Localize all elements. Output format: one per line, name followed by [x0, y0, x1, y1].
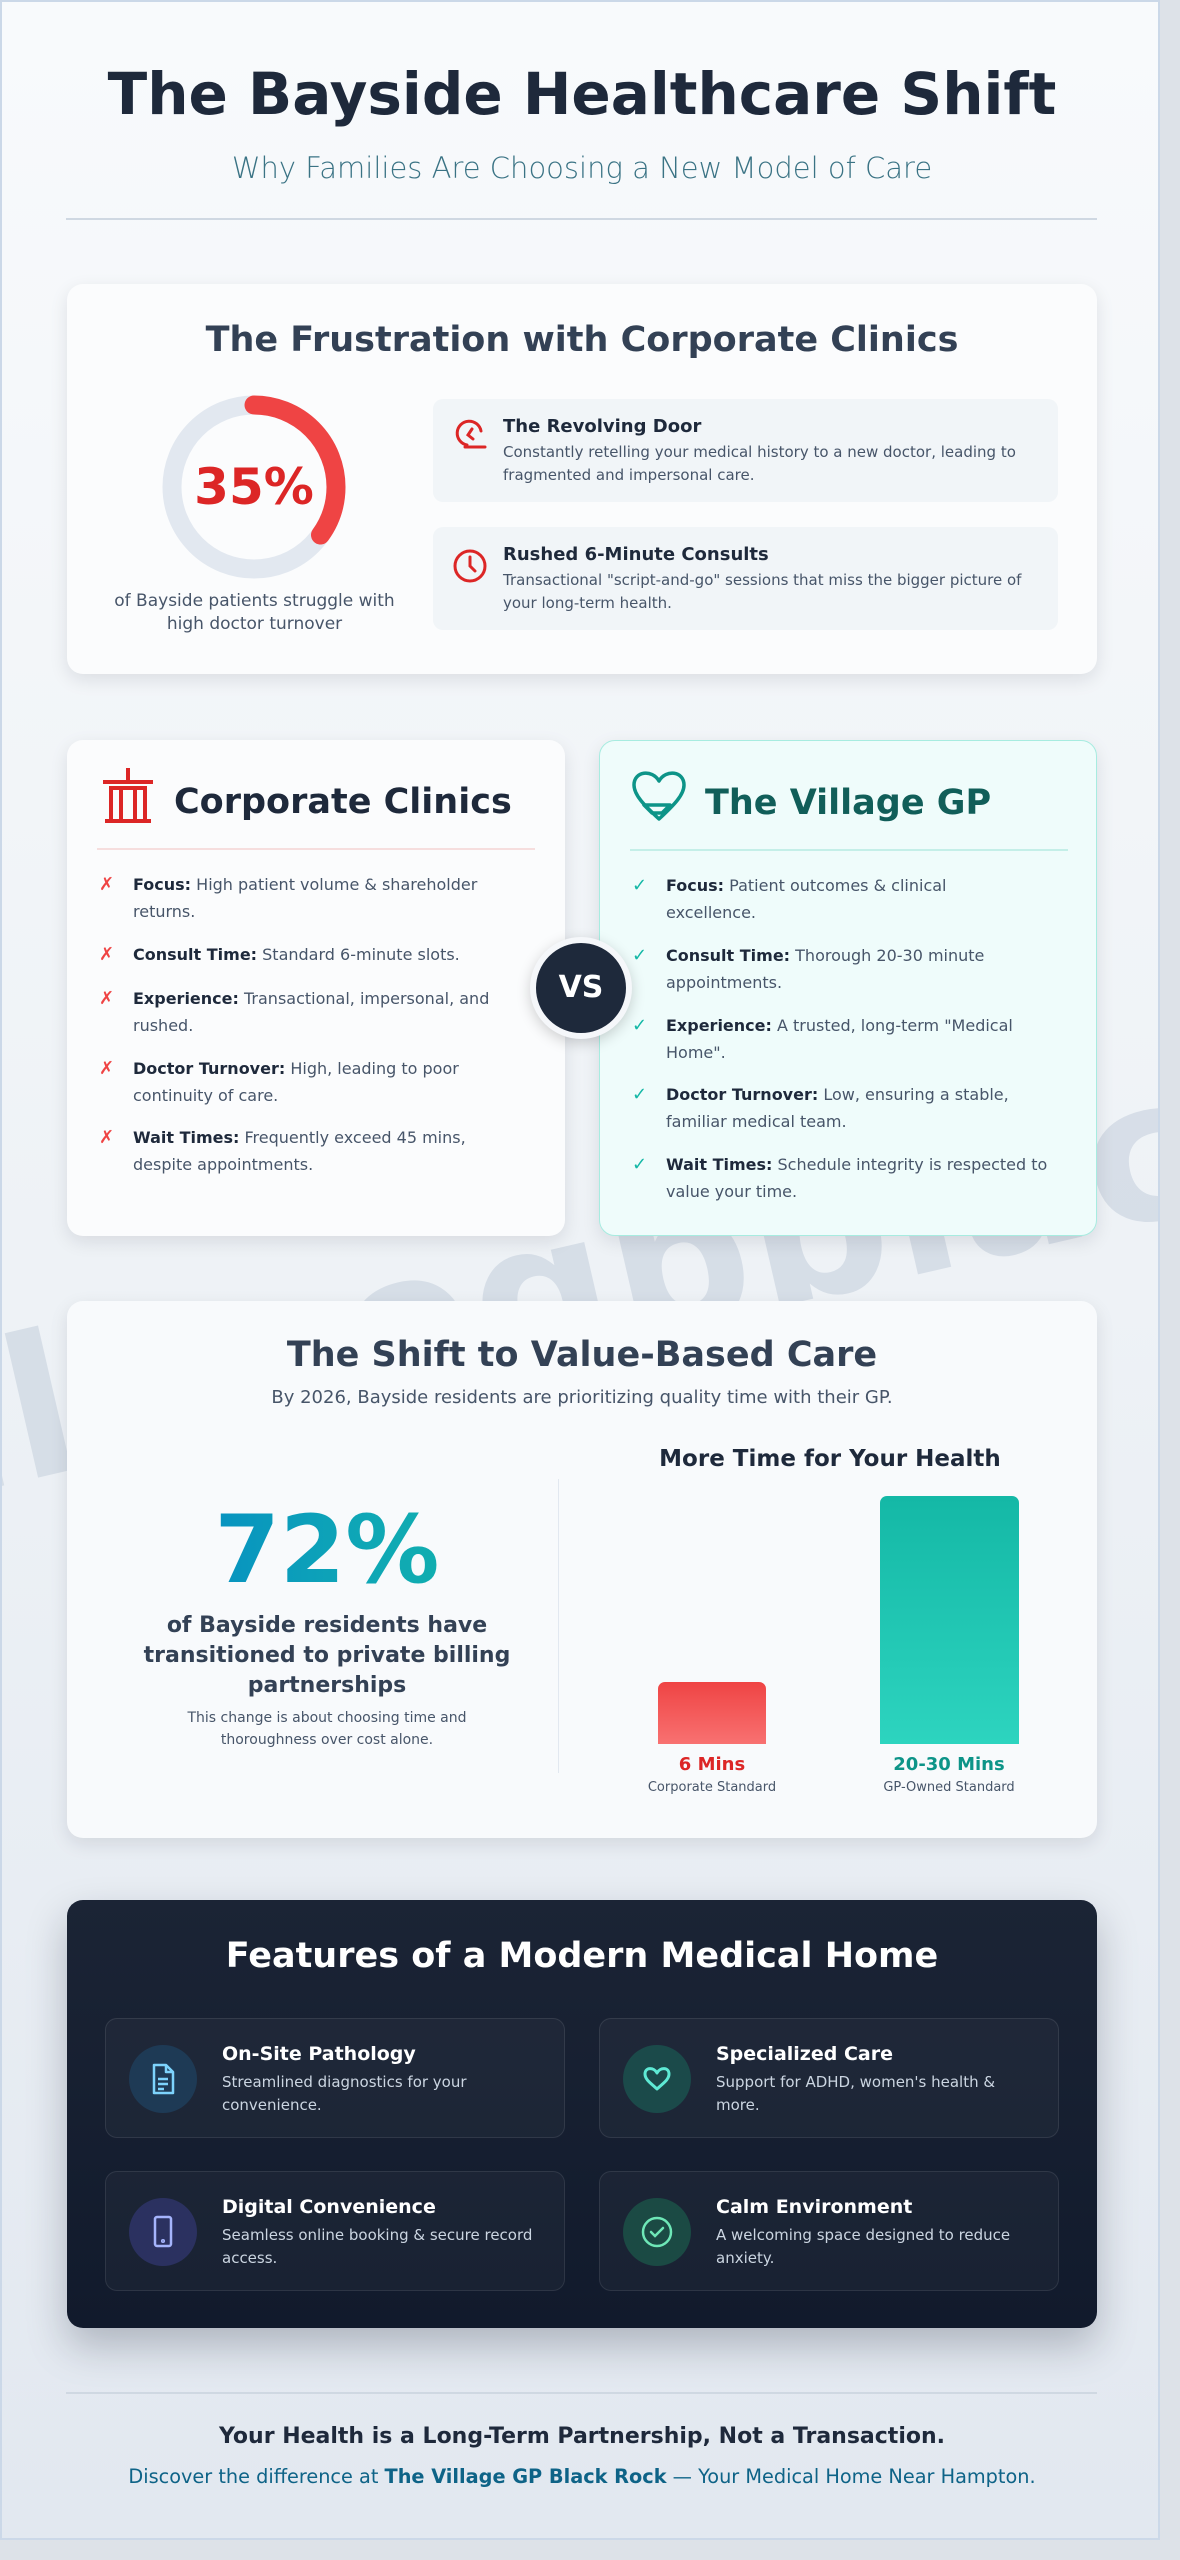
feature: specialized care: Support for ADHD, women's health & more.: [716, 2073, 995, 2114]
stat 72%: of Bayside residents have transitioned to private billing partnerships: [144, 1613, 510, 1698]
panel: village gp: ✓: [632, 945, 647, 966]
panel: corporate clinics: ✗: [99, 988, 114, 1009]
item: revolving door: Constantly retelling your medical history to a new doctor, leading to fragmented and impersonal care.: [503, 443, 1016, 484]
panel: village gp: ✓: [632, 1015, 647, 1036]
panel: corporate clinics: ✗: [99, 944, 114, 965]
vs badge: [530, 937, 632, 1039]
list: corporate drawbacks: [99, 874, 489, 1174]
list: corporate drawbacks: Doctor Turnover: High, leading to poor continuity of care.: [133, 1059, 459, 1105]
bar chart: consult time: GP-Owned Standard: [883, 1780, 1015, 1795]
panel: value-based care: [67, 1301, 1097, 1838]
stat 72%: This change is about choosing time and thoroughness over cost alone.: [187, 1710, 467, 1748]
heading: village gp: The Village GP: [705, 783, 991, 823]
footer link text: Discover the difference at The Village GP Black Rock — Your Medical Home Near Hampton.: [128, 2465, 1036, 2488]
title: The Bayside Healthcare Shift: [108, 60, 1056, 128]
feature: calm: Calm Environment: [716, 2196, 912, 2218]
list: village benefits: Wait Times: Schedule integrity is respected to value your time.: [666, 1155, 1047, 1201]
icon: revolving door: [456, 420, 486, 448]
item: revolving door: The Revolving Door: [503, 416, 701, 437]
item: rushed consults: Rushed 6-Minute Consults: [503, 544, 769, 565]
subtitle: Why Families Are Choosing a New Model of Care: [232, 151, 932, 185]
bar chart: consult time: 6 Mins: [679, 1754, 745, 1775]
heading: features: Features of a Modern Medical Home: [226, 1936, 938, 1976]
feature: digital: Digital Convenience: [222, 2196, 436, 2218]
list: village benefits: Consult Time: Thorough 20-30 minute appointments.: [666, 946, 984, 992]
panel: corporate clinics: ✗: [99, 874, 114, 895]
bar chart: consult time: Corporate Standard: [648, 1780, 776, 1795]
list: corporate drawbacks: Consult Time: Standard 6-minute slots.: [133, 945, 460, 964]
panel: corporate clinics: ✗: [99, 1058, 114, 1079]
feature: specialized care: Specialized Care: [716, 2043, 893, 2065]
subheading: By 2026, Bayside residents are prioritizing quality time with their GP.: [271, 1387, 893, 1408]
panel: frustration: [67, 284, 1097, 674]
list: corporate drawbacks: Focus: High patient volume & shareholder returns.: [133, 875, 477, 921]
panel: corporate clinics: ✗: [99, 1127, 114, 1148]
list: village benefits: Experience: A trusted, long-term "Medical Home".: [666, 1016, 1013, 1062]
footer tagline: Your Health is a Long-Term Partnership, Not a Transaction.: [219, 2424, 945, 2449]
icon: building: [103, 768, 153, 823]
feature: pathology: Streamlined diagnostics for your convenience.: [222, 2073, 467, 2114]
heading: corporate clinics: Corporate Clinics: [174, 782, 512, 822]
heading: frustration: The Frustration with Corporate Clinics: [206, 320, 958, 360]
feature: specialized care: [599, 2018, 1059, 2138]
donut caption: of Bayside patients struggle with high doctor turnover: [114, 591, 395, 634]
list: corporate drawbacks: Experience: Transactional, impersonal, and rushed.: [133, 989, 489, 1035]
item: rushed consults: [433, 527, 1058, 630]
panel: features: [67, 1900, 1097, 2328]
item: rushed consults: Transactional "script-and-go" sessions that miss the bigger picture of your long-term health.: [503, 571, 1021, 612]
panel: village gp: ✓: [632, 1154, 647, 1175]
list: corporate drawbacks: Wait Times: Frequently exceed 45 mins, despite appointments.: [133, 1128, 466, 1174]
feature: digital: Seamless online booking & secure record access.: [222, 2226, 532, 2267]
feature: calm: [599, 2171, 1059, 2291]
bar chart: consult time: 20-30 Mins: [893, 1754, 1005, 1775]
item: revolving door: [433, 399, 1058, 502]
bar chart: consult time: [648, 1446, 1019, 1795]
stat 72%: [144, 1496, 510, 1748]
list: village benefits: Focus: Patient outcomes & clinical excellence.: [666, 876, 946, 922]
feature: pathology: On-Site Pathology: [222, 2043, 416, 2065]
panel: corporate clinics: [67, 740, 565, 1236]
feature: pathology: [105, 2018, 565, 2138]
list: village benefits: Doctor Turnover: Low, ensuring a stable, familiar medical team.: [666, 1085, 1009, 1131]
icon: clock: [454, 550, 486, 582]
feature: digital: [105, 2171, 565, 2291]
stat 72%: 72%: [214, 1496, 440, 1605]
donut chart 35%: 35%: [194, 458, 314, 516]
icon: heart hands: [632, 771, 686, 821]
panel: village gp: ✓: [632, 1084, 647, 1105]
vs badge: VS: [559, 970, 603, 1005]
list: village benefits: [632, 875, 1047, 1201]
feature: calm: A welcoming space designed to reduce anxiety.: [716, 2226, 1010, 2267]
panel: village gp: ✓: [632, 875, 647, 896]
bar chart: consult time: More Time for Your Health: [659, 1446, 1001, 1472]
panel: village gp: [599, 740, 1097, 1236]
donut chart 35%: [162, 396, 346, 578]
heading: shift: The Shift to Value-Based Care: [287, 1335, 877, 1375]
